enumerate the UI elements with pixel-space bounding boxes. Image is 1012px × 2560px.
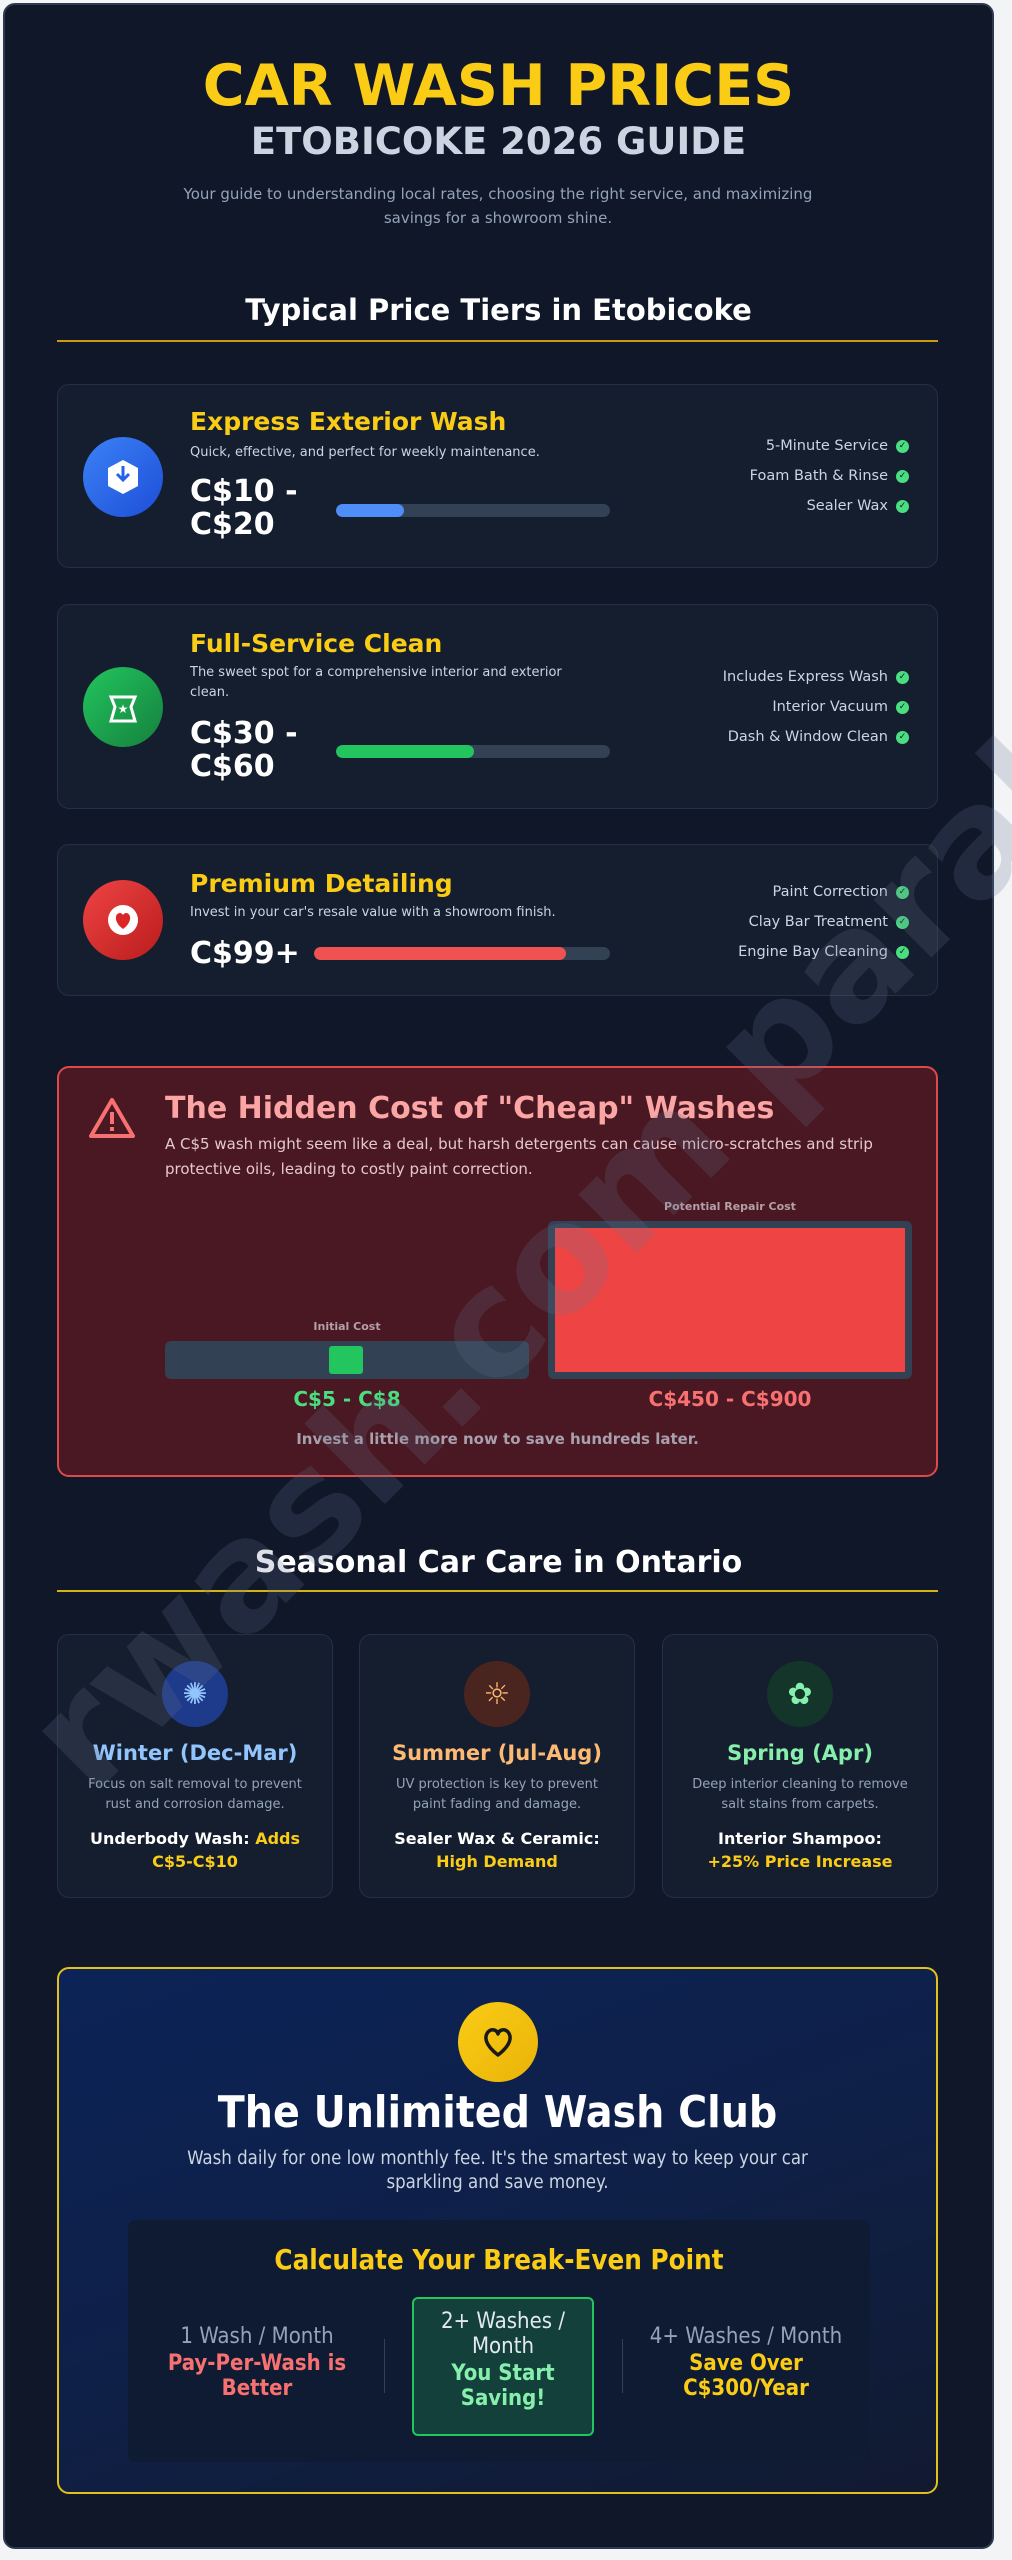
icon: warning [89, 1098, 136, 1138]
chart: repair cost: C$450 - C$900 [649, 1387, 811, 1411]
bar [336, 504, 610, 517]
bar [314, 947, 610, 960]
panel: express tier [57, 384, 938, 568]
panel: summer: Sealer Wax & Ceramic: High Demand [394, 1829, 600, 1871]
panel: full-service tier [57, 604, 938, 809]
option 1: 1 Wash / Month [180, 2324, 334, 2349]
heading: seasonal: Seasonal Car Care in Ontario [255, 1545, 742, 1580]
features [750, 438, 909, 514]
panel: express tier: Quick, effective, and perfect for weekly maintenance. [190, 445, 540, 460]
price: C$20 [190, 507, 275, 542]
features: ✓ [899, 732, 906, 742]
panel: full-service tier: The sweet spot for a comprehensive interior and exterior clean. [190, 665, 562, 700]
option 2: 2+ Washes / Month [441, 2309, 565, 2359]
panel: spring [662, 1634, 938, 1898]
price [190, 474, 298, 542]
icon: detailing [83, 880, 163, 960]
option 3: 4+ Washes / Month [650, 2324, 842, 2349]
panel: hidden cost [57, 1066, 938, 1477]
chart: initial cost [165, 1320, 529, 1411]
heading: The Unlimited Wash Club [218, 2087, 777, 2138]
text: Wash daily for one low monthly fee. It's the smartest way to keep your car sparkling and save money. [187, 2148, 808, 2193]
features: ✓ [899, 702, 906, 712]
features: ✓ [899, 440, 906, 450]
features: ✓ [899, 886, 906, 896]
panel: winter [57, 1634, 333, 1898]
panel: winter: Focus on salt removal to prevent rust and corrosion damage. [88, 1777, 302, 1812]
icon: heart [458, 2002, 538, 2082]
option 1: Pay-Per-Wash is Better [168, 2351, 346, 2401]
panel: spring: Deep interior cleaning to remove salt stains from carpets. [692, 1777, 908, 1812]
price: C$99+ [190, 936, 300, 971]
icon: sun [464, 1661, 530, 1727]
features: ✓ [899, 500, 906, 510]
tier title: Premium Detailing [190, 869, 453, 898]
features: Foam Bath & Rinse [750, 468, 888, 484]
chart: repair cost: Potential Repair Cost [664, 1200, 796, 1213]
features: Engine Bay Cleaning [738, 944, 888, 960]
icon: snow [162, 1661, 228, 1727]
calc heading: Calculate Your Break-Even Point [274, 2244, 724, 2276]
panel: winter: Winter (Dec-Mar) [93, 1741, 297, 1765]
features: ✓ [899, 946, 906, 956]
panel: summer [359, 1634, 635, 1898]
panel: premium tier [57, 844, 938, 996]
heading: The Hidden Cost of "Cheap" Washes [165, 1091, 774, 1126]
features: Interior Vacuum [772, 699, 888, 715]
features [738, 884, 909, 960]
panel: winter: Underbody Wash: Adds C$5-C$10 [90, 1829, 300, 1871]
option 3 [650, 2324, 842, 2401]
bar [336, 745, 610, 758]
price: C$30 - [190, 716, 298, 751]
heading: price tiers: Typical Price Tiers in Etobicoke [245, 293, 752, 327]
chart: repair cost [548, 1200, 912, 1411]
icon: car wash [83, 437, 163, 517]
price: C$60 [190, 749, 275, 784]
features: Clay Bar Treatment [749, 914, 888, 930]
features: Dash & Window Clean [728, 729, 888, 745]
price [190, 716, 298, 784]
subtitle: ETOBICOKE 2026 GUIDE [251, 120, 746, 163]
features: ✓ [899, 470, 906, 480]
option 3: Save Over C$300/Year [683, 2351, 809, 2401]
panel: spring: Spring (Apr) [727, 1741, 873, 1765]
chart: initial cost: Initial Cost [313, 1320, 381, 1333]
icon: sun: ☼ [484, 1676, 510, 1712]
icon: flower [767, 1661, 833, 1727]
calculator [128, 2220, 870, 2462]
features: ✓ [899, 672, 906, 682]
option 1 [168, 2324, 346, 2401]
panel: premium tier: Invest in your car's resale value with a showroom finish. [190, 905, 556, 920]
icon: snow: ✺ [182, 1676, 208, 1712]
price: C$10 - [190, 474, 298, 509]
title: CAR WASH PRICES [203, 53, 794, 119]
icon: interior: ★ [118, 702, 128, 716]
panel: spring: Interior Shampoo: [718, 1829, 882, 1848]
text: A C$5 wash might seem like a deal, but harsh detergents can cause micro-scratches and strip protective oils, leading to costly paint correction. [165, 1135, 873, 1178]
panel: summer: UV protection is key to prevent paint fading and damage. [396, 1777, 598, 1812]
icon: flower: ✿ [787, 1676, 813, 1712]
option 2 [412, 2297, 594, 2436]
features: Includes Express Wash [723, 669, 888, 685]
features: ✓ [899, 916, 906, 926]
footnote: Invest a little more now to save hundreds later. [296, 1430, 699, 1448]
features: Sealer Wax [807, 498, 888, 514]
panel: summer: Summer (Jul-Aug) [392, 1741, 602, 1765]
tier title: Full-Service Clean [190, 629, 442, 658]
intro text: Your guide to understanding local rates, choosing the right service, and maximizing savings for a showroom shine. [184, 185, 812, 227]
chart: initial cost: C$5 - C$8 [293, 1387, 401, 1411]
panel: spring: +25% Price Increase [707, 1852, 893, 1871]
panel: wash club [57, 1967, 938, 2494]
tier title: Express Exterior Wash [190, 407, 506, 436]
features: Paint Correction [772, 884, 888, 900]
features: 5-Minute Service [766, 438, 888, 454]
icon: interior [83, 667, 163, 747]
option 2: You Start Saving! [451, 2361, 555, 2411]
features [723, 669, 909, 745]
